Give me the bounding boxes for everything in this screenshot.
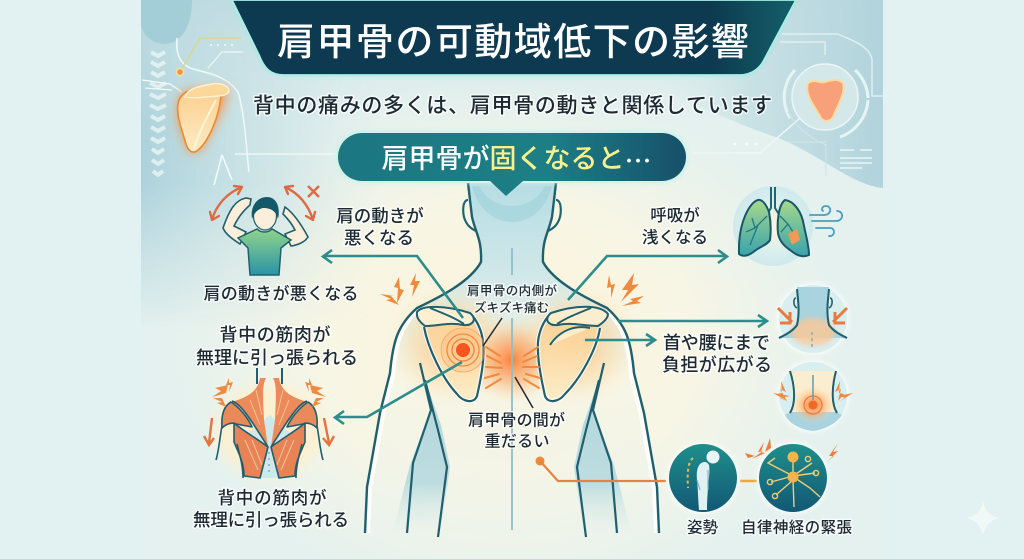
- icon: neck strain: [777, 283, 849, 355]
- head shading crescent: [472, 186, 552, 222]
- wind: [810, 206, 842, 236]
- text: heaviness between scapulae: 重だるい: [484, 432, 550, 450]
- icon: lungs with breath: [733, 186, 842, 266]
- decorative scapula diagram at top right: [693, 34, 883, 176]
- muscle fibres: [245, 390, 294, 470]
- body outline: [365, 183, 659, 533]
- central body figure: [365, 183, 659, 537]
- icon: person raising arms: [210, 186, 319, 275]
- text: inner scapula throbbing: 肩甲骨の内側が: [467, 283, 557, 298]
- spine line: [511, 248, 513, 530]
- arrow: to shoulder movement: [323, 250, 463, 318]
- strain bolts: [212, 378, 326, 407]
- leader line: inner scapula pain: [483, 318, 502, 346]
- text: burden spreads: 首や腰にまで: [663, 333, 770, 353]
- text: inner scapula throbbing: ズキズキ痛む: [474, 300, 549, 315]
- body silhouette: [365, 183, 659, 533]
- pill text: 肩甲骨が固くなると…: [382, 140, 652, 178]
- lightning bolts left shoulder: [380, 273, 420, 305]
- right scapula: [538, 307, 608, 401]
- text: back muscles pulled lower: 背中の筋肉が: [218, 488, 327, 508]
- text: heaviness between scapulae: [468, 410, 565, 450]
- strain arrows: [204, 418, 334, 445]
- icon: lower back pain: [773, 360, 853, 432]
- central panel background: [141, 0, 883, 559]
- text: inner scapula throbbing: [467, 283, 557, 315]
- lightning bolts right shoulder: [607, 273, 644, 306]
- decorative anatomy: neck, spine and scapula at top left: [141, 0, 337, 185]
- text: shoulder movement: [336, 206, 424, 248]
- text: back muscles pulled lower: 無理に引っ張られる: [193, 510, 349, 530]
- arrow: to neck: [618, 315, 767, 327]
- text: heaviness between scapulae: 肩甲骨の間が: [468, 410, 565, 430]
- text: posture: 姿勢: [687, 518, 718, 536]
- text: back muscles pulled lower: [193, 488, 349, 530]
- lightning bolts near nerves: [745, 438, 838, 462]
- leader line: between scapulae: [515, 377, 533, 408]
- shoulder glow: [386, 283, 518, 407]
- text: shallow breathing: 呼吸が: [650, 205, 700, 225]
- text: shallow breathing: 浅くなる: [642, 228, 708, 247]
- icon: scapula with glow: [178, 83, 229, 152]
- icon: orange scapula: [807, 80, 844, 121]
- ears: [463, 200, 561, 231]
- arm inner lines: [407, 363, 617, 537]
- left scapula: [417, 307, 484, 401]
- text: burden spreads: 負担が広がる: [662, 354, 772, 375]
- text: shallow breathing: [642, 205, 708, 247]
- icon: back muscles: [204, 368, 334, 478]
- connector: posture to nerves: [740, 480, 757, 482]
- text: back muscles pulled upper: 無理に引っ張られる: [196, 348, 358, 368]
- text: shoulder movement under icon: 肩の動きが悪くなる: [204, 284, 358, 304]
- arrow: to neck and waist text: [585, 334, 655, 346]
- title banner: [232, 0, 796, 75]
- text: back muscles pulled upper: [196, 324, 358, 368]
- text: shoulder movement: 悪くなる: [344, 228, 414, 248]
- icon: posture: [667, 442, 739, 514]
- text: back muscles pulled upper: 背中の筋肉が: [220, 324, 330, 345]
- pill heading with tail: [336, 131, 688, 196]
- pain target on scapula: [441, 328, 485, 372]
- subtitle: 背中の痛みの多くは、肩甲骨の動きと関係しています: [253, 94, 772, 118]
- connector: orange line to posture: [536, 456, 666, 481]
- title text: 肩甲骨の可動域低下の影響: [277, 22, 749, 64]
- icon: autonomic nerves: [757, 442, 829, 514]
- arrow: to breathing: [568, 250, 727, 300]
- icon: corner sparkle: [966, 501, 1000, 536]
- white halo outline: [368, 312, 656, 533]
- text: shoulder movement: 肩の動きが: [336, 206, 424, 226]
- text: autonomic nerve tension: 自律神経の緊張: [741, 518, 852, 536]
- left muscles: [216, 378, 323, 478]
- pain rays between scapulae: [485, 347, 540, 388]
- text: burden spreads: [662, 333, 772, 375]
- inflamed lung area: [788, 229, 800, 245]
- arrow: to back muscles: [335, 362, 462, 424]
